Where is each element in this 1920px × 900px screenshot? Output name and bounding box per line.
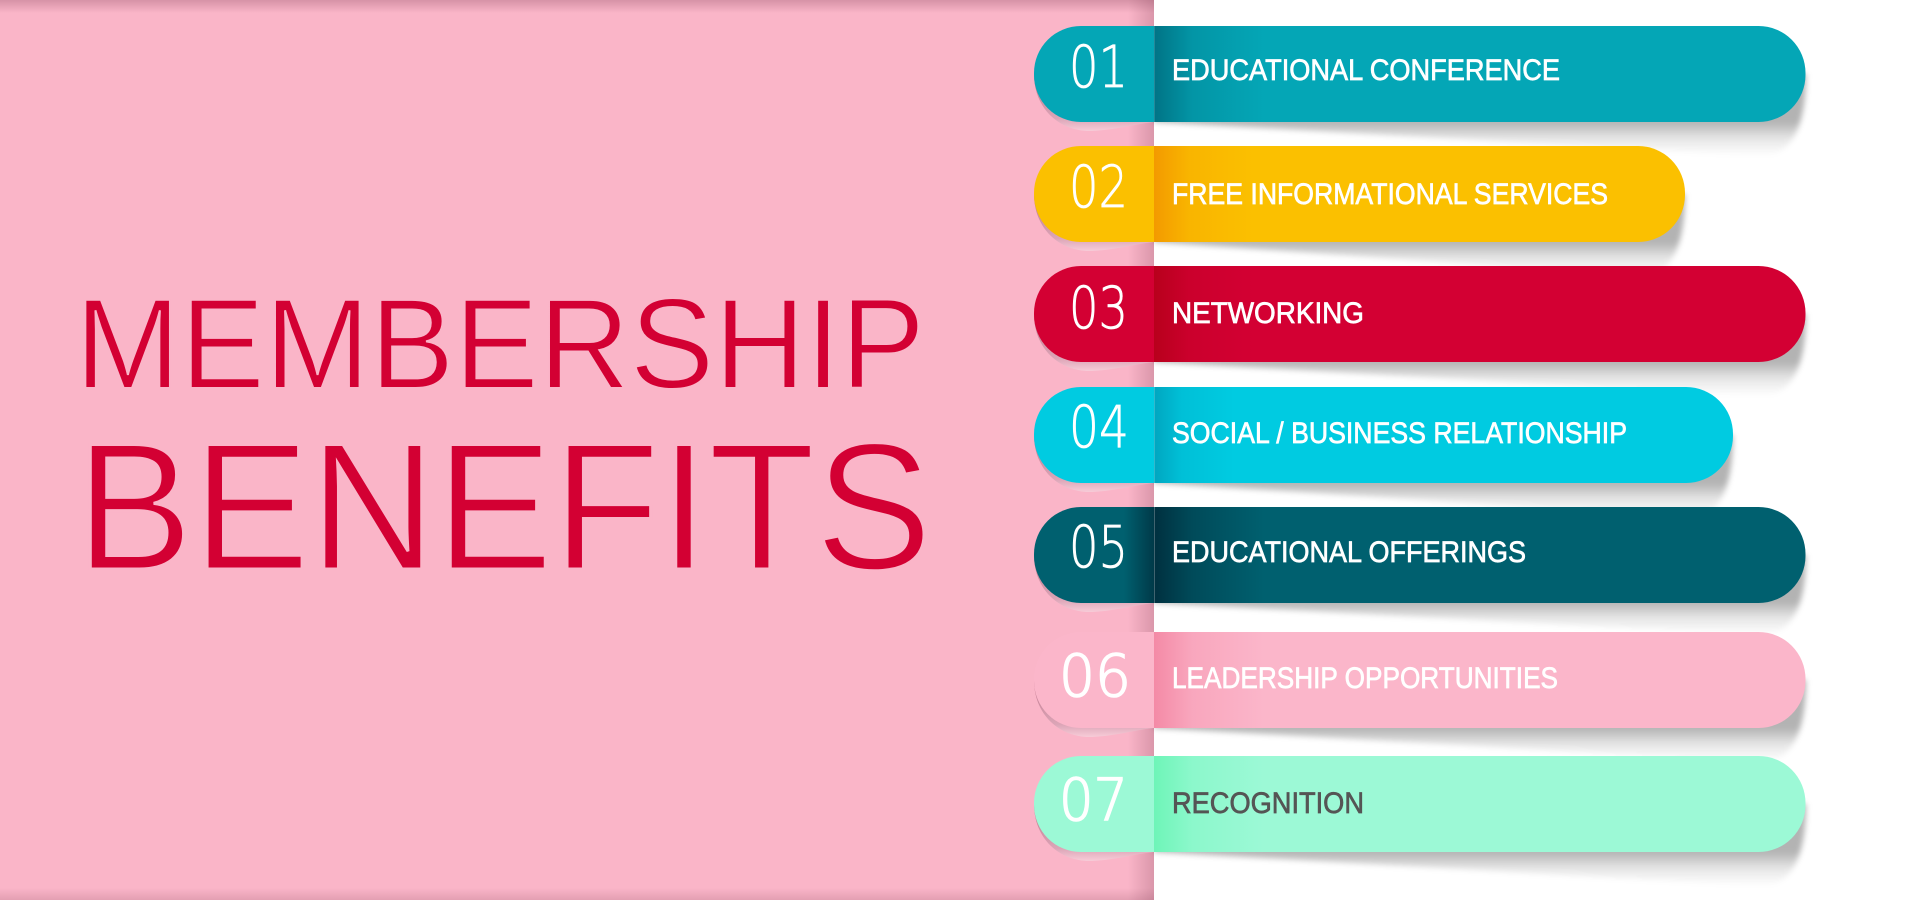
number 05: 05 — [1069, 513, 1128, 581]
benefit row 02 — [1034, 146, 1685, 276]
label 06: LEADERSHIP OPPORTUNITIES — [1172, 662, 1558, 695]
pink background panel — [0, 0, 1154, 900]
number 04: 04 — [1069, 393, 1129, 461]
benefit row 01 — [1034, 26, 1806, 156]
number 01: 01 — [1069, 33, 1128, 101]
label 01: EDUCATIONAL CONFERENCE — [1172, 54, 1560, 87]
benefit row 04 — [1034, 387, 1733, 517]
benefit row 06 — [1034, 632, 1806, 762]
number 06: 06 — [1059, 642, 1131, 710]
label 04: SOCIAL / BUSINESS RELATIONSHIP — [1172, 417, 1627, 450]
number 07: 07 — [1059, 766, 1128, 834]
label 05: EDUCATIONAL OFFERINGS — [1172, 536, 1526, 569]
benefit row 03 — [1034, 266, 1806, 396]
label 02: FREE INFORMATIONAL SERVICES — [1172, 178, 1608, 211]
label 07: RECOGNITION — [1172, 787, 1364, 820]
number 02: 02 — [1069, 153, 1128, 221]
number 03: 03 — [1069, 274, 1128, 342]
label 03: NETWORKING — [1172, 297, 1364, 330]
benefit row 07 — [1034, 756, 1806, 886]
title — [75, 273, 932, 608]
heading: benefits: BENEFITS — [76, 406, 932, 608]
heading: membership: MEMBERSHIP — [75, 273, 925, 416]
benefit row 05 — [1034, 507, 1806, 635]
